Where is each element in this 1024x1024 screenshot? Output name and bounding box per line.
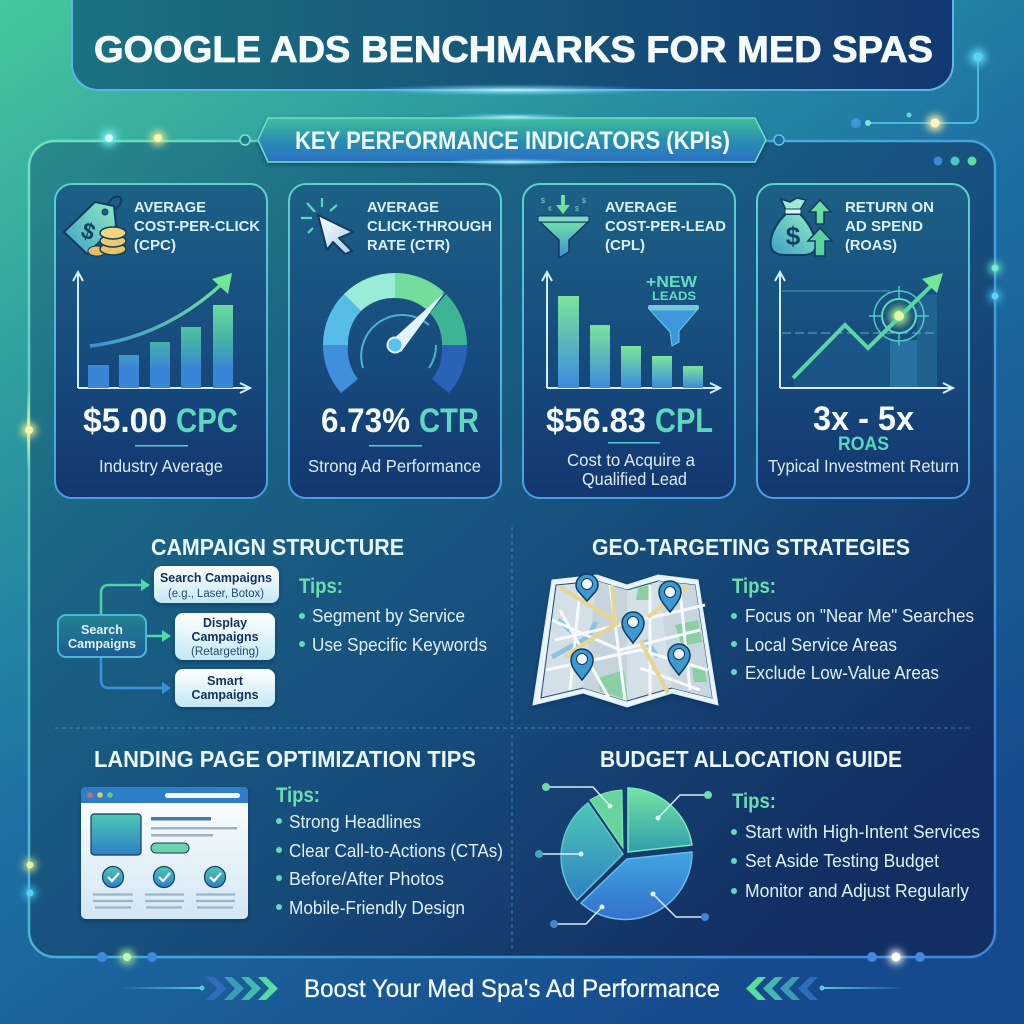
tips list: Segment by Service	[312, 605, 465, 626]
box: smart campaigns	[175, 669, 275, 707]
heading: CAMPAIGN STRUCTURE	[151, 534, 404, 560]
heading: LANDING PAGE OPTIMIZATION TIPS	[94, 746, 476, 772]
value: CPL: $56.83	[546, 402, 646, 440]
icon: funnel	[538, 195, 589, 258]
icon: funnel: $	[541, 198, 545, 205]
tips list	[299, 575, 487, 655]
chevrons left	[206, 977, 278, 1000]
browser illustration	[81, 787, 248, 919]
gauge chart	[323, 273, 467, 393]
icon: money bag and arrows: $	[786, 221, 801, 251]
section dividers	[55, 527, 970, 950]
card heading: AVERAGE	[134, 199, 206, 216]
tips list: Strong Headlines	[289, 811, 421, 832]
card heading: COST-PER-CLICK	[134, 218, 260, 235]
map illustration	[533, 574, 718, 707]
icon: click cursor	[301, 198, 353, 254]
title banner: GOOGLE ADS BENCHMARKS FOR MED SPAS	[94, 29, 933, 70]
box: search campaigns: (e.g., Laser, Botox)	[168, 588, 264, 600]
panel glow nodes	[22, 130, 1001, 964]
KPI card: CTR	[289, 184, 501, 498]
bar chart with funnel: LEADS	[652, 289, 696, 303]
line chart with target	[775, 272, 953, 393]
card heading: AVERAGE	[367, 199, 439, 216]
card heading: CLICK-THROUGH	[367, 218, 492, 235]
root box	[58, 615, 146, 657]
tips list	[276, 784, 503, 918]
card heading: (ROAS)	[845, 237, 897, 254]
value: CPC: CPC	[176, 402, 238, 440]
heading: BUDGET ALLOCATION GUIDE	[600, 746, 902, 772]
icon: funnel: ¢	[548, 206, 552, 213]
tips list: Monitor and Adjust Regularly	[745, 880, 970, 901]
caption: Qualified Lead	[582, 469, 687, 489]
bar chart with growth arrow	[73, 272, 250, 393]
card heading: (CPC)	[134, 237, 176, 254]
tips list: Tips:	[732, 790, 776, 813]
title banner	[72, 0, 953, 96]
card heading: RATE (CTR)	[367, 237, 450, 254]
box: smart campaigns: Campaigns	[192, 688, 259, 702]
caption: Strong Ad Performance	[308, 456, 481, 476]
value: CPC: $5.00	[83, 402, 167, 440]
tips list: Set Aside Testing Budget	[745, 850, 939, 871]
tips list: Mobile-Friendly Design	[289, 897, 465, 918]
value: CTR: CTR	[419, 402, 479, 440]
tips list	[731, 790, 980, 901]
section: campaign structure	[58, 534, 487, 707]
icon: funnel: $	[575, 206, 579, 213]
heading: GEO-TARGETING STRATEGIES	[592, 534, 910, 560]
section: geo-targeting	[533, 534, 974, 707]
icon: funnel: $	[582, 198, 586, 205]
KPI card: ROAS	[757, 184, 969, 498]
card heading: (CPL)	[605, 237, 645, 254]
footer call to action	[118, 975, 908, 1003]
caption: Typical Investment Return	[768, 456, 959, 476]
section: budget allocation	[535, 746, 980, 928]
value: CTR: 6.73%	[321, 402, 410, 440]
box: display campaigns: Campaigns	[192, 630, 259, 644]
tips list: Tips:	[276, 784, 320, 807]
main panel	[29, 141, 995, 957]
root box: Campaigns	[68, 636, 136, 651]
KPI card: CPC	[55, 184, 267, 498]
KPI card: ROAS: ROAS	[838, 434, 889, 455]
icon: price tag and coins: $	[78, 217, 99, 246]
tips list: Tips:	[299, 575, 343, 598]
pie chart	[535, 783, 712, 928]
root box: Search	[81, 622, 123, 637]
circuit decoration: top right	[851, 49, 986, 131]
chevrons right	[746, 977, 818, 1000]
caption: Cost to Acquire a	[567, 450, 695, 470]
tips list: Start with High-Intent Services	[745, 821, 980, 842]
tips list	[731, 575, 974, 683]
KPI heading pill: KEY PERFORMANCE INDICATORS (KPIs)	[295, 127, 730, 155]
tips list: Before/After Photos	[289, 868, 444, 889]
section: landing page	[81, 746, 503, 919]
icon: money bag and arrows	[771, 198, 832, 256]
tips list: Local Service Areas	[745, 634, 897, 655]
flow arrows	[101, 579, 171, 694]
box: smart campaigns: Smart	[207, 674, 244, 688]
KPI card: CPL	[523, 184, 735, 498]
box: search campaigns	[154, 566, 279, 603]
KPI heading pill	[258, 113, 766, 166]
box: search campaigns: Search Campaigns	[160, 571, 272, 585]
tips list: Tips:	[732, 575, 776, 598]
box: display campaigns: (Retargeting)	[191, 646, 259, 658]
value: ROAS: 3x - 5x	[813, 400, 914, 438]
box: display campaigns	[175, 613, 275, 660]
footer call to action: Boost Your Med Spa's Ad Performance	[304, 975, 720, 1003]
card heading: AD SPEND	[845, 218, 923, 235]
card heading: RETURN ON	[845, 199, 934, 216]
card heading: AVERAGE	[605, 199, 677, 216]
card heading: COST-PER-LEAD	[605, 218, 726, 235]
icon: price tag and coins	[64, 197, 126, 256]
tips list: Exclude Low-Value Areas	[745, 662, 939, 683]
box: display campaigns: Display	[203, 616, 247, 630]
bar chart with funnel: +NEW	[646, 274, 698, 291]
tips list: Clear Call-to-Actions (CTAs)	[289, 840, 503, 861]
bar chart with funnel	[542, 272, 720, 393]
caption: Industry Average	[99, 456, 223, 476]
tips list: Focus on "Near Me" Searches	[745, 605, 974, 626]
tips list: Use Specific Keywords	[312, 634, 487, 655]
value: CPL: CPL	[655, 402, 713, 440]
